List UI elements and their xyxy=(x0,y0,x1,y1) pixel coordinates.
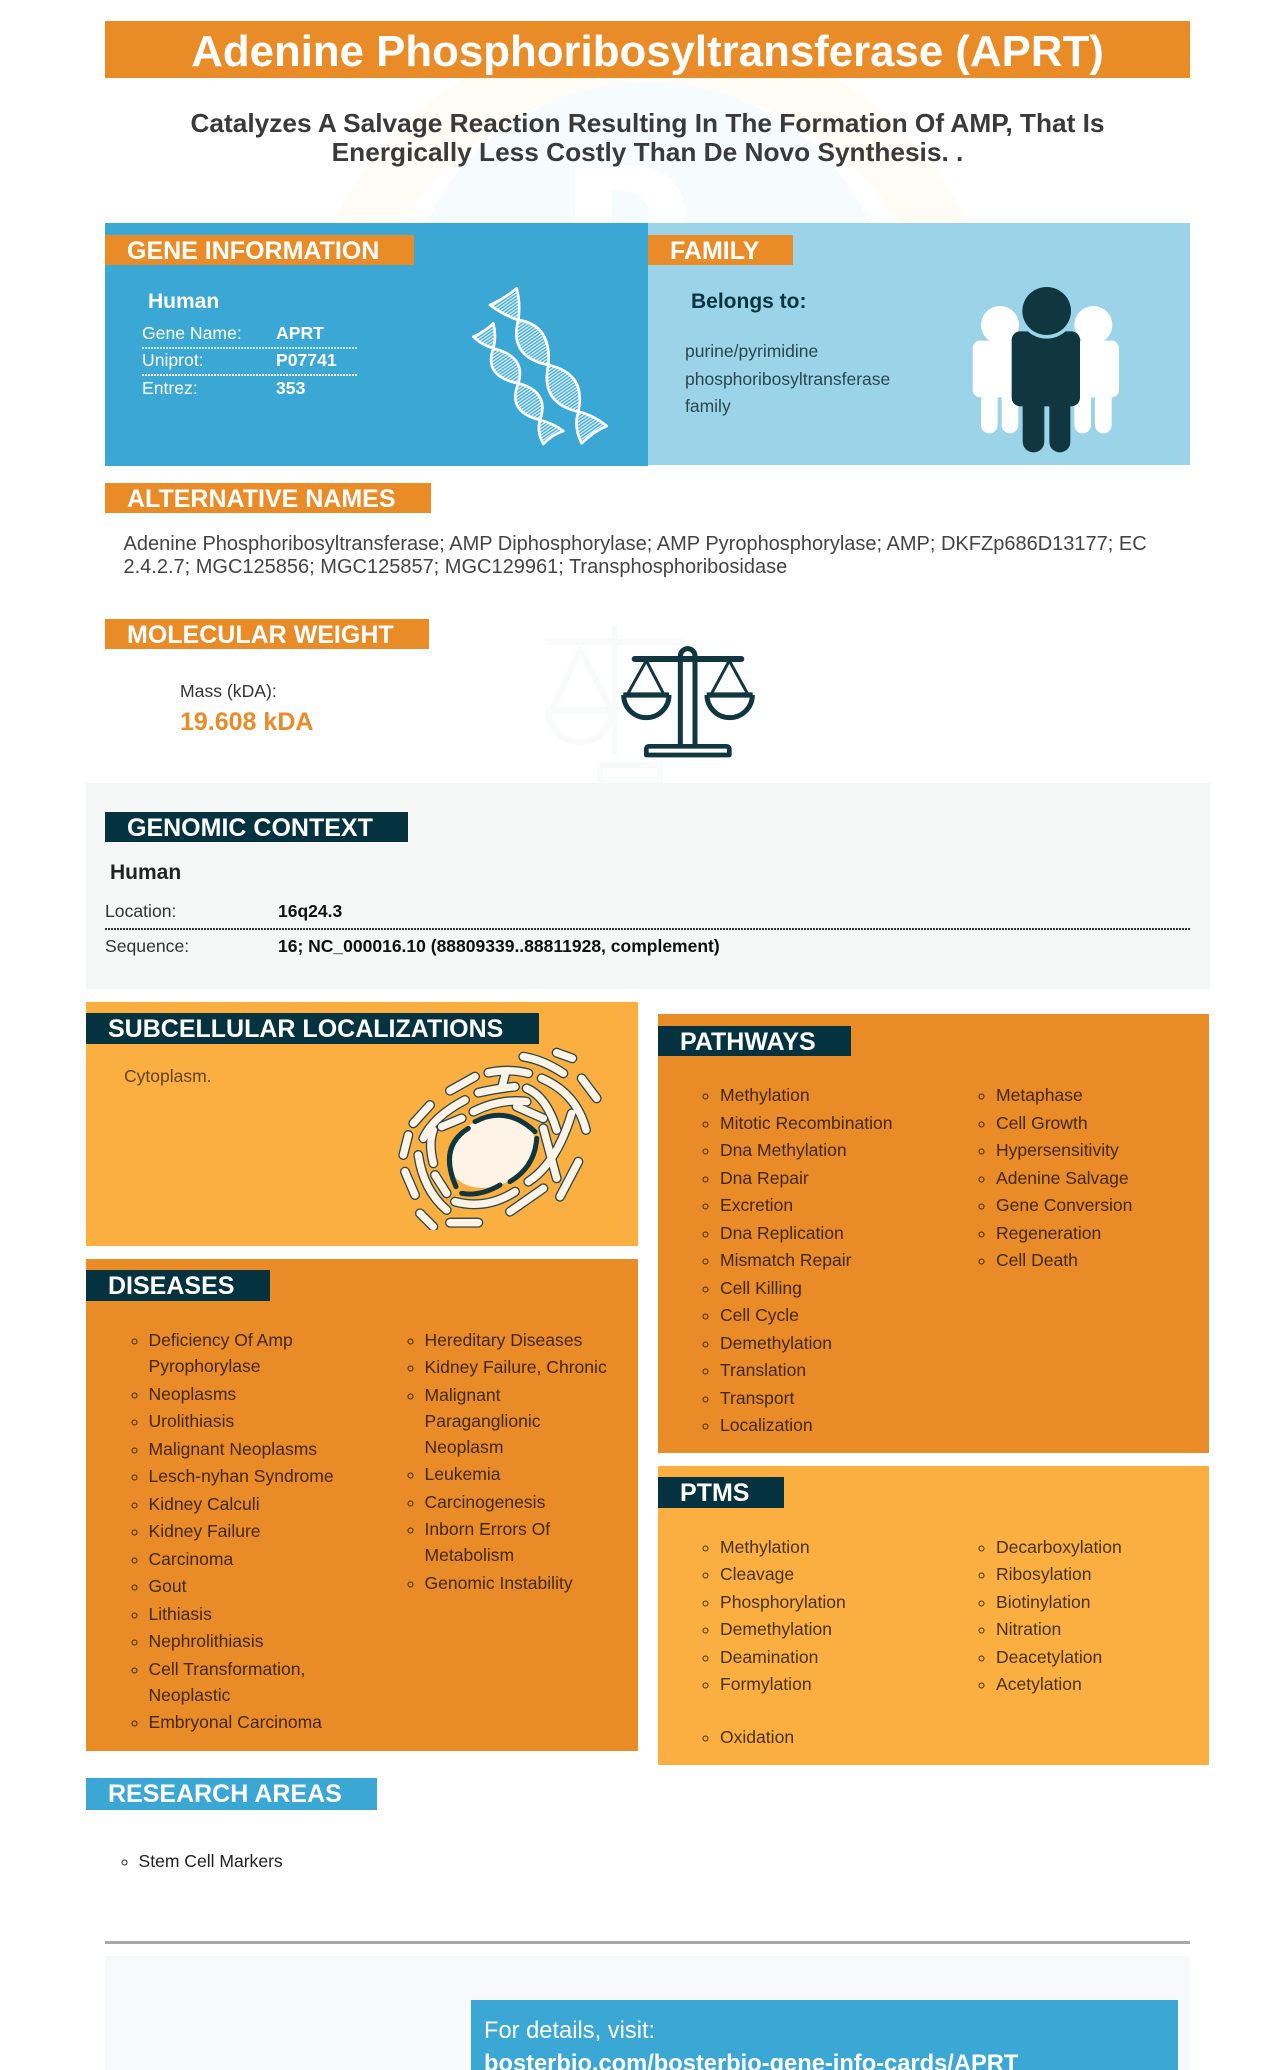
gene details table: Gene Name: xyxy=(142,323,242,343)
PTMs list column 1 xyxy=(702,1536,846,1747)
heading: gene information: GENE INFORMATION xyxy=(127,237,379,265)
location row: Location: xyxy=(105,901,176,921)
pathways list column 2: Cell Growth xyxy=(996,1112,1088,1132)
alternative names text xyxy=(124,533,1147,578)
species label: Human xyxy=(148,290,219,313)
pathways list column 2: Adenine Salvage xyxy=(996,1168,1129,1188)
mass label: Mass (kDA): xyxy=(180,681,277,701)
family description: phosphoribosyltransferase xyxy=(685,368,890,388)
heading: molecular weight: MOLECULAR WEIGHT xyxy=(127,621,394,649)
heading: research areas: RESEARCH AREAS xyxy=(108,1780,342,1808)
pathways list column 1: Cell Killing xyxy=(720,1278,802,1298)
diseases list column 2: Malignant xyxy=(424,1384,501,1404)
pathways list column 1: Demethylation xyxy=(720,1332,832,1352)
subtitle: Catalyzes A Salvage Reaction Resulting In The Formation Of AMP, That Is xyxy=(190,108,1105,138)
pathways list column 1: Dna Replication xyxy=(720,1222,844,1242)
gene details table xyxy=(142,323,357,398)
title banner: Adenine Phosphoribosyltransferase (APRT) xyxy=(191,27,1104,76)
PTMs list column 1: Oxidation xyxy=(720,1727,794,1747)
pathways list column 2: Metaphase xyxy=(996,1085,1083,1105)
diseases list column 2: Metabolism xyxy=(424,1545,514,1565)
diseases list column 2: Leukemia xyxy=(424,1464,501,1484)
location row xyxy=(105,901,342,921)
diseases list column 1: Deficiency Of Amp xyxy=(148,1330,293,1350)
PTMs list column 2: Nitration xyxy=(996,1619,1061,1639)
panel: pathways xyxy=(658,1014,1209,1453)
heading: PTMs: PTMS xyxy=(680,1479,749,1507)
gene details table: APRT xyxy=(276,323,324,343)
PTMs list column 2: Acetylation xyxy=(996,1674,1082,1694)
heading: subcellular localizations: SUBCELLULAR LOCALIZATIONS xyxy=(108,1015,503,1043)
callout: details link: For details, visit: xyxy=(484,2018,655,2044)
pathways list column 1: Mismatch Repair xyxy=(720,1250,852,1270)
PTMs list column 2: Deacetylation xyxy=(996,1646,1102,1666)
localization text: Cytoplasm. xyxy=(124,1066,212,1086)
heading: alternative names: ALTERNATIVE NAMES xyxy=(127,485,396,513)
diseases list column 2: Genomic Instability xyxy=(424,1572,573,1592)
gene details table: 353 xyxy=(276,378,305,398)
panel: PTMs xyxy=(658,1466,1209,1765)
PTMs list column 1: Cleavage xyxy=(720,1564,794,1584)
PTMs list column 2: Biotinylation xyxy=(996,1592,1091,1612)
panel: gene information xyxy=(105,223,648,466)
icon: balance scale xyxy=(621,646,755,758)
diseases list column 2: Kidney Failure, Chronic xyxy=(424,1357,607,1377)
watermark: faint logo arches xyxy=(333,78,967,223)
footer panel xyxy=(105,1956,1190,2070)
diseases list column 1: Nephrolithiasis xyxy=(148,1631,263,1651)
watermark: faint scale xyxy=(540,620,690,785)
diseases list column 1: Lithiasis xyxy=(148,1604,212,1624)
PTMs list column 2: Decarboxylation xyxy=(996,1536,1122,1556)
callout: details link xyxy=(471,2000,1178,2070)
subtitle xyxy=(190,108,1105,167)
species label: Human xyxy=(110,861,181,884)
diseases list column 2 xyxy=(408,1330,607,1592)
diseases list column 1: Kidney Calculi xyxy=(148,1494,260,1514)
diseases list column 1: Kidney Failure xyxy=(148,1521,261,1541)
pathways list column 2: Hypersensitivity xyxy=(996,1140,1119,1160)
heading: pathways: PATHWAYS xyxy=(680,1028,816,1056)
diseases list column 1: Malignant Neoplasms xyxy=(148,1438,317,1458)
family description: purine/pyrimidine xyxy=(685,341,818,361)
PTMs list column 2 xyxy=(978,1536,1122,1694)
diseases list column 1 xyxy=(132,1330,334,1732)
PTMs list column 1: Methylation xyxy=(720,1536,810,1556)
diseases list column 1: Gout xyxy=(148,1576,187,1596)
diseases list column 1: Urolithiasis xyxy=(148,1411,234,1431)
gene details table: P07741 xyxy=(276,350,337,370)
PTMs list column 1: Deamination xyxy=(720,1646,818,1666)
PTMs list column 1: Demethylation xyxy=(720,1619,832,1639)
sequence row: 16; NC_000016.10 (88809339..88811928, complement) xyxy=(278,936,720,956)
mass value: 19.608 kDA xyxy=(180,708,313,736)
sequence row: Sequence: xyxy=(105,936,189,956)
family description: family xyxy=(685,396,731,416)
research areas list: Stem Cell Markers xyxy=(138,1851,283,1871)
alternative names text: Adenine Phosphoribosyltransferase; AMP Diphosphorylase; AMP Pyrophosphorylase; AMP; DKFZp686D13177; EC xyxy=(124,533,1147,555)
diseases list column 2: Carcinogenesis xyxy=(424,1492,545,1512)
pathways list column 2: Cell Death xyxy=(996,1250,1078,1270)
location row: 16q24.3 xyxy=(278,901,342,921)
PTMs list column 1: Formylation xyxy=(720,1674,812,1694)
icon: group of people xyxy=(972,287,1119,452)
subtitle: Energically Less Costly Than De Novo Synthesis. . xyxy=(332,137,963,167)
diseases list column 2: Paraganglionic xyxy=(424,1410,540,1430)
panel: subcellular localizations xyxy=(86,1002,638,1246)
heading: diseases xyxy=(86,1270,270,1301)
panel: family xyxy=(648,223,1190,465)
PTMs list column 2: Ribosylation xyxy=(996,1564,1092,1584)
panel: genomic context xyxy=(86,783,1210,989)
gene details table: Entrez: xyxy=(142,378,198,398)
diseases list column 1: Lesch-nyhan Syndrome xyxy=(148,1466,334,1486)
panel: diseases xyxy=(86,1259,638,1751)
icon: cell with nucleus and reticulum xyxy=(398,1048,602,1230)
pathways list column 1: Translation xyxy=(720,1360,806,1380)
diseases list column 1: Carcinoma xyxy=(148,1548,233,1568)
pathways list column 1: Transport xyxy=(720,1388,794,1408)
family description xyxy=(685,341,890,416)
heading: diseases: DISEASES xyxy=(108,1272,234,1300)
PTMs list column 1: Phosphorylation xyxy=(720,1592,846,1612)
diseases list column 2: Inborn Errors Of xyxy=(424,1519,550,1539)
alternative names text: 2.4.2.7; MGC125856; MGC125857; MGC129961; Transphosphoribosidase xyxy=(124,556,787,578)
pathways list column 2: Gene Conversion xyxy=(996,1195,1132,1215)
pathways list column 1: Cell Cycle xyxy=(720,1305,799,1325)
icon: DNA double helix xyxy=(472,286,608,446)
diseases list column 1: Cell Transformation, xyxy=(148,1658,305,1678)
pathways list column 1: Mitotic Recombination xyxy=(720,1112,892,1132)
pathways list column 1: Localization xyxy=(720,1415,813,1435)
pathways list column 1: Dna Repair xyxy=(720,1168,809,1188)
heading: family xyxy=(648,235,793,265)
heading: family: FAMILY xyxy=(670,237,759,265)
pathways list column 2: Regeneration xyxy=(996,1222,1101,1242)
pathways list column 1 xyxy=(702,1085,892,1435)
pathways list column 1: Dna Methylation xyxy=(720,1140,847,1160)
pathways list column 1: Methylation xyxy=(720,1085,810,1105)
heading: pathways xyxy=(658,1026,851,1056)
diseases list column 1: Pyrophorylase xyxy=(148,1356,261,1376)
diseases list column 1: Neoplasms xyxy=(148,1384,236,1404)
pathways list column 1: Excretion xyxy=(720,1195,793,1215)
heading: genomic context: GENOMIC CONTEXT xyxy=(127,814,373,842)
heading: PTMs xyxy=(658,1477,784,1508)
belongs to label: Belongs to: xyxy=(691,290,806,313)
pathways list column 2 xyxy=(978,1085,1132,1270)
diseases list column 1: Neoplastic xyxy=(148,1684,230,1704)
diseases list column 2: Neoplasm xyxy=(424,1436,503,1456)
gene details table: Uniprot: xyxy=(142,350,204,370)
diseases list column 1: Embryonal Carcinoma xyxy=(148,1712,322,1732)
diseases list column 2: Hereditary Diseases xyxy=(424,1330,582,1350)
